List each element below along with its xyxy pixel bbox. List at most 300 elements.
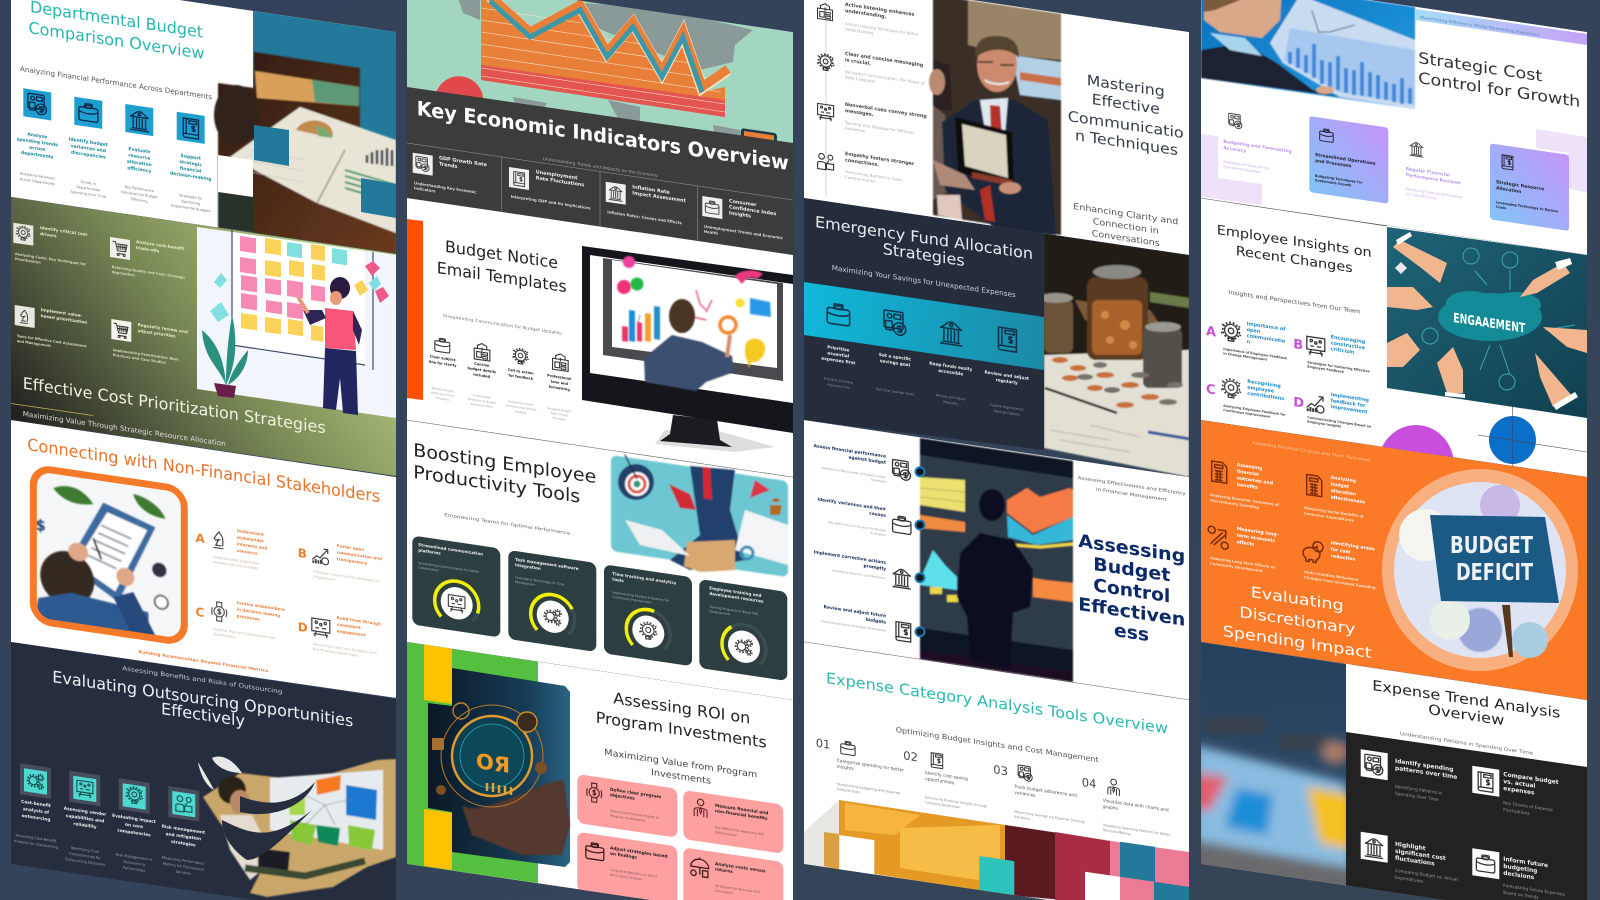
trend item 2: vs. actual [1503, 778, 1535, 790]
cost item: regularly review: Practices and Case Studies [113, 353, 166, 365]
stakeholder item A: interests and [237, 541, 267, 551]
title: Program Investments [596, 709, 767, 752]
stakeholder item D: engagement [337, 628, 366, 637]
indicator: confidence: Health [704, 229, 718, 236]
outsourcing item 2: capabilities and [66, 813, 104, 825]
savings tip 1: expenses first [821, 355, 855, 367]
outsourcing item 2: Outsourcing Decisions [65, 857, 105, 867]
item: support strategic decisions: decision-making [170, 170, 211, 183]
photo: analyst silhouette before dashboards [920, 438, 1073, 682]
item: analyze spending trends: Analyze [27, 132, 47, 140]
slide: Evaluating Discretionary Spending Impact [1201, 420, 1587, 700]
impact item 3: Community Development [1210, 562, 1263, 573]
title: Boosting Employee [413, 440, 596, 488]
subtitle [1078, 475, 1186, 503]
subtitle: Assessing Benefits and Risks of Outsourcing [122, 665, 283, 696]
impact item 4: Changes from Increased Spending [1304, 576, 1376, 590]
step 02: Category Breakdown [925, 800, 960, 810]
timeline item 4: Analyzing Variances in Budget Performance [821, 619, 886, 633]
stakeholder item D: consistent [337, 622, 361, 630]
savings tip 1: Expenses First [827, 383, 850, 390]
decorative circles and crosshair [1378, 407, 1587, 505]
cost item: identify drivers [13, 222, 88, 266]
title [1078, 531, 1185, 646]
timeline item 1: against budget [848, 454, 886, 466]
communication point 1 [818, 2, 919, 42]
stakeholder item B: communication and [337, 550, 382, 561]
strategy card 2: Budgeting Techniques for [1315, 174, 1363, 185]
tool card 2: Leveraging Technology for Time [515, 575, 564, 587]
insight A [1206, 321, 1288, 365]
timeline item 1 [814, 443, 924, 484]
photo: man presenting certificate [929, 0, 1061, 235]
insight D: improvement [1331, 404, 1368, 416]
ROI card 2: Measure financial and [715, 803, 768, 817]
tool card 4: Training Programs to Boost Skill [708, 605, 758, 616]
gradient ribbon with tagline [1415, 9, 1587, 45]
title and subtitle: Effective Cost Prioritization Strategies [23, 374, 326, 437]
tool card 1: Streamlining Communication for Better [418, 561, 480, 574]
tool card 3: Implementing Feedback Systems for [612, 590, 670, 603]
title: Recent Changes [1236, 244, 1353, 276]
indicator: unemployment: Rate Fluctuations [536, 175, 584, 188]
email item 4: Examples [553, 416, 566, 422]
tool card 1 [412, 536, 500, 639]
title: Expense Category Analysis Tools Overview [826, 669, 1168, 738]
stakeholder item D: Non-Financial Stakeholders [313, 647, 359, 658]
savings tip 4: regularly [996, 377, 1018, 386]
trend item 1 [1361, 749, 1457, 804]
cost item: value-based [14, 305, 87, 348]
timeline item 2 [817, 497, 924, 537]
circular photo: budget deficit sign: DEFICIT [1456, 560, 1533, 586]
strategy card 2: Sustainable Growth [1315, 178, 1352, 188]
title: Strategies [883, 240, 965, 270]
savings tip 4: Explore High-Interest [990, 403, 1024, 412]
cost item: regularly review: Regularly review and [138, 322, 188, 334]
slide: Expense Category Analysis Tools Overview [804, 642, 1189, 900]
step 04: Visualize data with charts and [1103, 798, 1169, 813]
title: Employee Insights on [1217, 223, 1372, 261]
communication point 2 [817, 51, 925, 91]
communication point 1: Understanding [845, 26, 874, 36]
communication point 4: Communication [845, 174, 876, 184]
savings tip 2 [876, 310, 914, 397]
savings tip 3 [929, 320, 972, 407]
strategy card 1: Operational Expenses [1223, 165, 1261, 174]
cost item: trade-offs: trade-offs [136, 245, 160, 254]
item: identify budget variances: Spending Over Time [71, 190, 106, 199]
strategy card 2: Streamlined Operations [1315, 152, 1376, 167]
trend item 2: Key Drivers of Expense [1503, 800, 1553, 813]
email item 3: Professional Email [508, 399, 533, 407]
item: evaluate resource allocation: Evaluate [128, 146, 150, 155]
ROI card 4: returns [715, 867, 733, 875]
impact item 3: effects [1237, 539, 1255, 548]
item: support strategic decisions: Strategies for [179, 193, 203, 201]
item: support strategic decisions: Departmental Budgets [171, 203, 211, 213]
item: identify budget variances: Departmental [76, 185, 100, 192]
stakeholder item A: Perspectives and Interests [213, 560, 258, 571]
email item 1: line for clarity [429, 360, 457, 368]
impact item 2: allocation [1331, 488, 1356, 498]
insight A: Importance of [1247, 321, 1286, 333]
cost item: value-based: based prioritization [41, 313, 87, 325]
outsourcing item 3: competencies [117, 828, 151, 839]
subtitle: Assessing Financial Choices and Their Outcomes [1252, 440, 1370, 462]
timeline item 3 [814, 549, 924, 589]
stakeholder item D [298, 616, 381, 657]
ROI card 1: Define clear program [610, 787, 662, 800]
item: identify budget variances: Trends in [79, 180, 96, 186]
title: ess [1114, 620, 1149, 646]
photo: glowing ROI hologram in hand: OЯ [476, 748, 510, 778]
impact item 1: outcomes and [1237, 475, 1273, 487]
title: Key Economic Indicators Overview [417, 96, 789, 175]
timeline item 2: Identify variances and their [817, 497, 887, 513]
step 01: 01 [816, 736, 830, 752]
outsourcing item 1: analysis of [23, 806, 49, 816]
strategy card 4: Costs [1496, 205, 1506, 210]
footer tagline: Building Relationships Beyond Financial Metrics [138, 649, 269, 673]
savings tip 3: Regularly [943, 400, 958, 406]
communication point 2: is crucial. [845, 57, 871, 67]
communication point 3: Tailoring Your Message for Different [844, 120, 914, 135]
insight B: Employee Feedback [1307, 365, 1345, 374]
email item 2: Customizable [473, 393, 491, 400]
step 04 [1082, 775, 1171, 842]
trend item 1: patterns over time [1395, 765, 1457, 781]
slide: Boosting Employee Productivity Tools [407, 420, 793, 700]
impact item 3: term economic [1237, 533, 1275, 544]
photo: glowing ROI hologram in hand [428, 668, 570, 867]
outsourcing item 1: Assessing Cost-Benefit [16, 833, 57, 843]
item: analyze spending trends: across [29, 145, 46, 153]
stakeholder item C [196, 601, 284, 640]
communication point 4: connections. [845, 157, 879, 168]
indicator: GDP: Understanding Key Economic [414, 180, 477, 195]
timeline item 2: Evaluation [870, 531, 886, 537]
decorative lilac shapes [1201, 134, 1262, 205]
email item 1: Clear subject [430, 354, 456, 362]
strategy card 4: Allocation [1496, 185, 1521, 195]
cost item: value-based: and Management [17, 339, 51, 348]
item: identify budget variances: discrepancies [71, 150, 106, 161]
cost item: identify drivers: Identify critical cost [40, 225, 87, 237]
slide: Employee Insights on Recent Changes [1201, 198, 1587, 505]
cost item: trade-offs: Approaches [112, 270, 135, 277]
trend item 4: budgeting [1503, 863, 1537, 875]
strategy card 3: for Cost Efficiency [1406, 192, 1436, 201]
slide: Evaluating Outsourcing Opportunities Effectively [11, 642, 396, 900]
right column title: Effective [1092, 91, 1160, 118]
savings tip 3: Keep funds easily [929, 361, 972, 373]
tool card 4: development resources [709, 591, 764, 604]
bottom image: stacked yellow and red blocks [804, 800, 1189, 900]
photo: strategy whiteboard with torn edge [203, 759, 396, 897]
ROI card 4: Analyze costs versus [715, 861, 766, 875]
blurred photo: tablet close-up [1195, 642, 1352, 895]
impact item 2: Measuring Social Benefits of [1304, 506, 1364, 519]
map and downward chart illustration [435, 0, 777, 153]
timeline item 1: Assess financial performance [814, 443, 886, 460]
communication point 2: Nonverbal Communication: The Power of [845, 69, 925, 86]
impact item 3: Measuring long- [1237, 526, 1279, 538]
insight D: Employee Insights [1307, 420, 1341, 429]
indicator: inflation: Impact Assessment [632, 190, 686, 204]
insight C: Recognizing [1247, 379, 1281, 390]
outsourcing item 4: Risk management [162, 824, 205, 836]
impact item 1 [1210, 461, 1279, 513]
title: Evaluating Outsourcing Opportunities [52, 667, 353, 731]
outsourcing item 3: Partnerships [123, 866, 145, 873]
decorative torn-wave overlay [222, 782, 315, 860]
title: Productivity Tools [413, 462, 580, 508]
orange accent bar [407, 219, 423, 400]
communication point 3: Audiences [845, 125, 865, 133]
email item 2: budget details [467, 366, 496, 374]
insight D: D [1293, 395, 1304, 412]
item: support strategic decisions: financial [180, 166, 202, 175]
slide: Departmental Budget Comparison Overview [11, 0, 396, 254]
indicator: confidence: Consumer [729, 198, 757, 208]
stakeholder item C: Building Trust and Collaboration with [213, 627, 276, 640]
trend item 4: Inform future [1503, 856, 1548, 869]
title: Budget Notice [445, 237, 558, 272]
step 03: variances [1014, 790, 1036, 799]
subtitle: in Financial Management [1096, 487, 1167, 503]
indicator: GDP: Indicators [414, 185, 436, 194]
email item 4: tone and [551, 380, 568, 386]
email item 3: Updates [515, 409, 527, 415]
slide: Assessing Budget Control Effectiveness [804, 420, 1189, 700]
indicator: unemployment: Unemployment [536, 169, 578, 182]
item: analyze spending trends [17, 88, 58, 186]
communication point 2: Body Language [845, 74, 876, 84]
stakeholder item C: Stakeholders [213, 632, 236, 639]
insight D: feedback for [1331, 398, 1366, 409]
insight C: C [1206, 382, 1216, 398]
outsourcing item 3 [112, 778, 156, 874]
impact item 1: Assessing [1237, 462, 1262, 472]
insight C: contributions [1247, 391, 1284, 402]
title [1372, 678, 1560, 729]
title: Effectiven [1078, 594, 1185, 631]
stakeholder item B [298, 544, 382, 582]
savings tip 4: Savings Options [994, 409, 1020, 417]
subtitle: Understanding Trends and Impacts on the Economy [543, 156, 658, 178]
cost item: regularly review [111, 319, 188, 367]
ROI card 1 [577, 774, 677, 838]
savings tip 4 [984, 327, 1029, 417]
title [1418, 49, 1580, 111]
timeline item 2: Key Performance Indicators for Budget [828, 520, 887, 533]
impact item 1: financial [1237, 469, 1259, 478]
trend item 1: Spending Over Time [1395, 791, 1439, 803]
step 03: Solutions [1014, 815, 1030, 821]
email item 2: Concise [474, 362, 490, 368]
impact item 2: Analyzing [1331, 475, 1356, 484]
email item 2: Announcements [471, 402, 493, 409]
timeline item 3: Identifying Areas for Cost Reduction [832, 568, 886, 580]
ROI card 2: non-financial benefits [715, 808, 768, 822]
title [413, 440, 596, 508]
step 04: graphs [1103, 804, 1119, 812]
trend item 2 [1472, 766, 1559, 820]
stakeholder item C: processes [237, 613, 260, 622]
stakeholder item C: in decision-making [237, 607, 280, 618]
item: analyze spending trends: spending trends [17, 136, 58, 148]
cost item: value-based: Implement value- [41, 307, 82, 318]
outsourcing item 3: Evaluating impact [112, 813, 156, 825]
timeline item 2: causes [869, 512, 886, 519]
indicator: unemployment: Interpreting GDP and Its Implications [511, 194, 591, 211]
communication point 3 [818, 102, 927, 141]
title: Control for Growth [1418, 69, 1580, 111]
communication point 1: understanding. [845, 8, 887, 20]
slide: Effective Cost Prioritization Strategies [11, 197, 396, 476]
outsourcing item 1: Cost-benefit [21, 799, 51, 809]
title: Comparison Overview [28, 18, 204, 63]
strategy card 3 [1406, 142, 1462, 204]
slide: Connecting with Non-Financial Stakeholders [11, 420, 396, 698]
timeline item 3: Implement corrective actions [814, 549, 886, 566]
insight B: B [1293, 337, 1303, 353]
indicator: confidence: Confidence Index [729, 204, 777, 217]
email item 2: Templates for Budget [466, 397, 496, 405]
slide: Emergency Fund Allocation Strategies [804, 198, 1190, 477]
ROI card 4: Strategies for Accurate ROI [715, 884, 760, 894]
photo: open finance report on a desk [214, 52, 396, 254]
item: evaluate resource allocation: efficiency [127, 165, 151, 175]
insight A: n [1247, 339, 1251, 346]
savings tip 3: Review and Adjust [936, 393, 966, 402]
tool card 1: Streamlined communication [418, 542, 483, 557]
step 04: 04 [1082, 775, 1096, 791]
step 03 [993, 762, 1085, 829]
step 02: Identify cost-saving [925, 770, 968, 782]
step 03: Maximizing Savings via Expense Tracking [1014, 810, 1085, 824]
subtitle: Assessing Effectiveness and Efficiency [1078, 475, 1186, 497]
title: Assessing ROI on [613, 689, 750, 728]
indicator: GDP [412, 152, 487, 194]
trend item 3: Highlight [1395, 841, 1426, 852]
trend item 3 [1361, 832, 1458, 890]
circular photo: budget deficit sign: BUDGET [1450, 533, 1533, 559]
insight A: in Change Management [1223, 351, 1267, 362]
insight D: Communicating Changes Based on [1307, 415, 1372, 429]
outsourcing item 2: Competencies for [69, 852, 101, 860]
cost item: identify drivers: Prioritization [15, 257, 41, 265]
cost item: identify drivers: drivers [40, 231, 57, 239]
outsourcing item 3: Risk Management in [116, 853, 152, 862]
title: Spending Impact [1223, 622, 1372, 662]
cost item: regularly review: Implementing Prioritization: Best [113, 348, 179, 362]
step 03: 03 [993, 762, 1008, 778]
title: Email Templates [437, 258, 567, 296]
stakeholder item A: concerns [237, 548, 258, 556]
item: support strategic decisions: Optimizing [181, 199, 200, 206]
cost item: trade-offs: Balancing Quality and Cost: Strategic [112, 265, 185, 280]
savings tip 2: Set a specific [879, 352, 912, 363]
stakeholder item B: Foster open [337, 543, 364, 552]
trend item 3: Expenditures [1395, 875, 1424, 885]
outsourcing item 1: outsourcing [22, 813, 50, 823]
right column title: n Techniques [1075, 127, 1178, 159]
email item 3: Call to action [508, 368, 534, 376]
outsourcing item 4: Metrics for Outsourced [163, 862, 204, 872]
item: evaluate resource allocation: Indicators for Budget [121, 190, 158, 200]
slide: Key Economic Indicators Overview [407, 0, 793, 255]
trend item 2: Compare budget [1503, 771, 1559, 786]
ROI card 1: Program Investments [610, 814, 645, 823]
item: evaluate resource allocation: resource [128, 152, 150, 162]
savings tip 1 [821, 303, 855, 390]
stakeholder item A: A [196, 531, 205, 546]
email item 4 [547, 353, 571, 422]
email item 2: included [473, 372, 491, 379]
outsourcing item 1 [14, 763, 58, 850]
step 01: Analysis Tools [837, 787, 860, 794]
savings tip 1: essential [827, 350, 850, 360]
slide: Budget Notice Email Templates [407, 198, 793, 477]
impact item 3: Assessing Long-term Effects on [1210, 556, 1276, 570]
subtitle: Analyzing Financial Performance Across Departments [20, 64, 212, 101]
strategy card 3: Regular Financial [1406, 166, 1450, 179]
ROI card 1: objectives [610, 792, 635, 802]
right column title [1068, 72, 1184, 159]
insight A: communicatio [1247, 333, 1286, 345]
item: support strategic decisions: strategic [179, 159, 202, 168]
indicator: confidence [702, 196, 783, 240]
timeline item 3: promptly [864, 563, 886, 572]
indicator: confidence: Unemployment Trends and Economic [704, 224, 783, 240]
trend item 1: Identify spending [1395, 758, 1453, 773]
cost item: identify drivers: Analyzing Costs: Key Techniques for [15, 252, 86, 267]
impact item 4: Understanding Behavioral [1304, 570, 1358, 582]
strategy card 1: Strategies for Streamlining [1223, 160, 1269, 170]
indicator: inflation [606, 182, 686, 225]
communication point 4 [818, 151, 915, 188]
slide: Assessing ROI on Program Investments [407, 642, 793, 900]
tool card 3: Time tracking and analytics [612, 571, 677, 586]
impact item 3 [1208, 526, 1279, 575]
slide: Strategic Cost Control for Growth [1201, 0, 1587, 255]
title: Expense Trend Analysis [1372, 678, 1560, 722]
email item 4: formatting [549, 385, 570, 392]
stakeholder item A: Understand [237, 528, 264, 537]
step 04: Decision-Making [1103, 828, 1131, 836]
insight D: Implementing [1331, 392, 1369, 404]
subtitle: Maximizing Your Savings for Unexpected Expenses [832, 263, 1016, 299]
savings tip 3: accessible [938, 368, 963, 378]
title: Effectively [161, 699, 245, 730]
tool card 2: Management [515, 580, 536, 587]
step 04: Visualizing Spending Patterns for Better [1103, 823, 1171, 837]
trend item 4: decisions [1503, 870, 1535, 881]
right column subtitle: Conversations [1092, 229, 1160, 249]
cyan band [804, 282, 1044, 370]
email item 3: Communication Budget [505, 403, 537, 412]
tool card 2: integration [515, 562, 541, 571]
item: support strategic decisions: Support [181, 153, 202, 162]
item: evaluate resource allocation: Efficiency [131, 197, 148, 204]
indicator: GDP: GDP Growth Rate [439, 155, 487, 168]
trend item 3: fluctuations [1395, 855, 1435, 868]
impact item 4: for cost [1331, 547, 1351, 556]
title: Emergency Fund Allocation [815, 213, 1033, 263]
cost item: trade-offs: Analyze cost-benefit [136, 239, 184, 251]
